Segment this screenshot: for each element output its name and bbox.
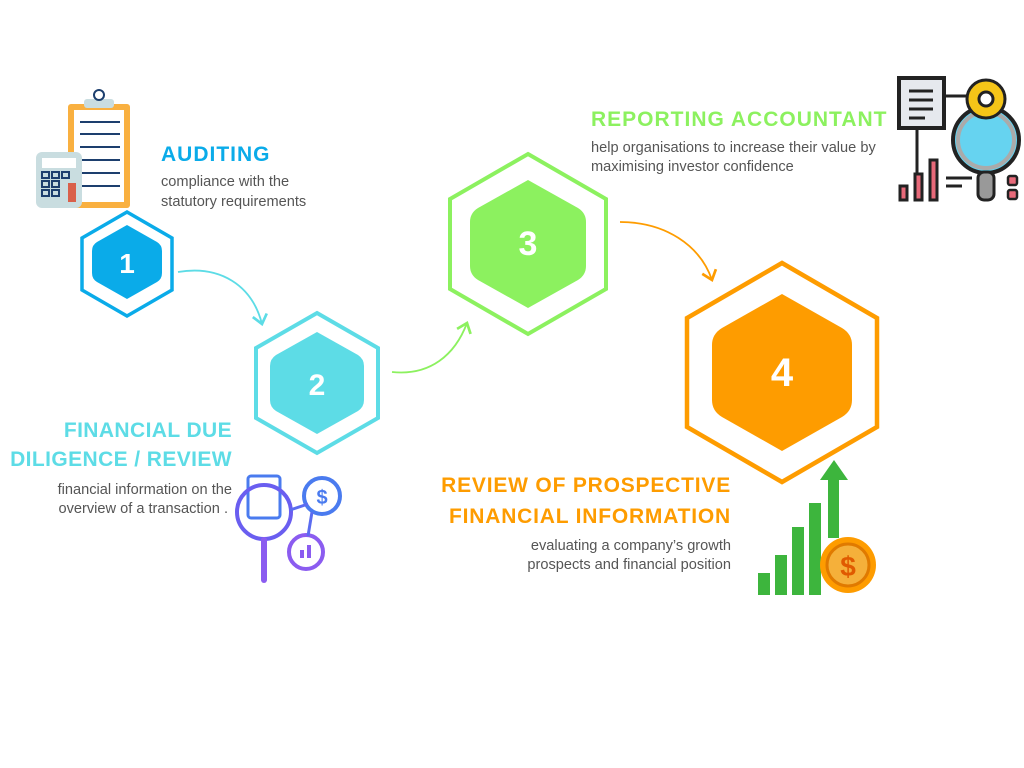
text: due diligence description: financial information on the — [58, 482, 232, 498]
heading: financial due diligence: DILIGENCE / REVIEW — [10, 448, 232, 471]
icon: clipboard and calculator — [36, 90, 130, 208]
arrow: 1 to 2 — [178, 271, 262, 324]
icon: document magnifier dollar: $ — [316, 487, 328, 509]
hexagon 4: 4 — [771, 351, 794, 395]
text: auditing description: compliance with the — [161, 174, 289, 190]
heading: financial due diligence: FINANCIAL DUE — [64, 419, 232, 442]
heading: auditing: AUDITING — [161, 143, 270, 166]
icon: growth bars and coin — [758, 460, 876, 595]
text: auditing description: statutory requirements — [161, 194, 306, 210]
hexagon 1 — [82, 212, 172, 316]
heading: reporting accountant: REPORTING ACCOUNTANT — [591, 108, 888, 131]
icon: growth bars and coin: $ — [840, 551, 856, 582]
text: due diligence description: overview of a transaction . — [58, 501, 228, 517]
text: reporting accountant description: help organisations to increase their value by — [591, 140, 876, 156]
arrow: 3 to 4 — [620, 222, 712, 280]
icon: document magnifier dollar — [237, 476, 340, 580]
icon: report and magnifier gear — [899, 78, 1019, 200]
hexagon 2: 2 — [309, 369, 325, 402]
text: review description: prospects and financial position — [527, 557, 731, 573]
heading: review of prospective financial information: FINANCIAL INFORMATION — [449, 505, 731, 528]
arrow: 2 to 3 — [392, 323, 467, 372]
heading: review of prospective financial information: REVIEW OF PROSPECTIVE — [441, 474, 731, 497]
hexagon 3 — [450, 154, 606, 334]
hexagon 2 — [256, 313, 378, 453]
text: reporting accountant description: maximising investor confidence — [591, 159, 794, 175]
hexagon 1: 1 — [119, 248, 135, 279]
hexagon 3: 3 — [519, 225, 537, 263]
text: review description: evaluating a company’s growth — [531, 538, 731, 554]
hexagon 4 — [687, 263, 877, 482]
